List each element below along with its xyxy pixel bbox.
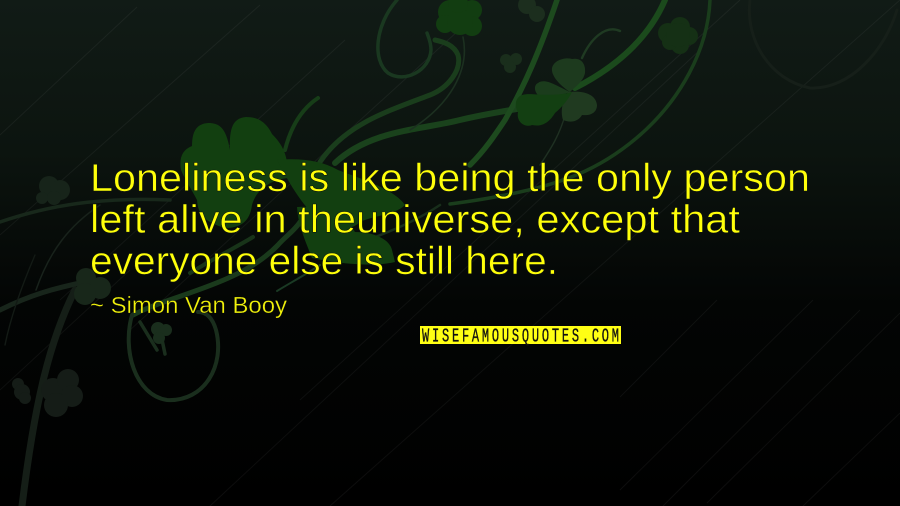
three-leaf clover (516, 58, 597, 126)
quote line 2: left alive in theuniverse, except that (90, 198, 740, 242)
small clover in loop (151, 322, 172, 344)
faint clover bottom left (12, 369, 83, 417)
quote line 3: everyone else is still here. (90, 240, 558, 283)
clover right (658, 17, 698, 54)
quote (90, 157, 810, 283)
top clover (436, 0, 482, 36)
faint clover left (36, 176, 70, 205)
faint clover lower left (74, 268, 111, 305)
quote line 1: Loneliness is like being the only person (90, 157, 810, 200)
author: ~ Simon Van Booy (90, 292, 288, 318)
small clover top (518, 0, 545, 22)
large clover (180, 117, 405, 265)
brand badge: WISEFAMOUSQUOTES.COM (422, 325, 619, 348)
small clover mid (500, 53, 522, 73)
